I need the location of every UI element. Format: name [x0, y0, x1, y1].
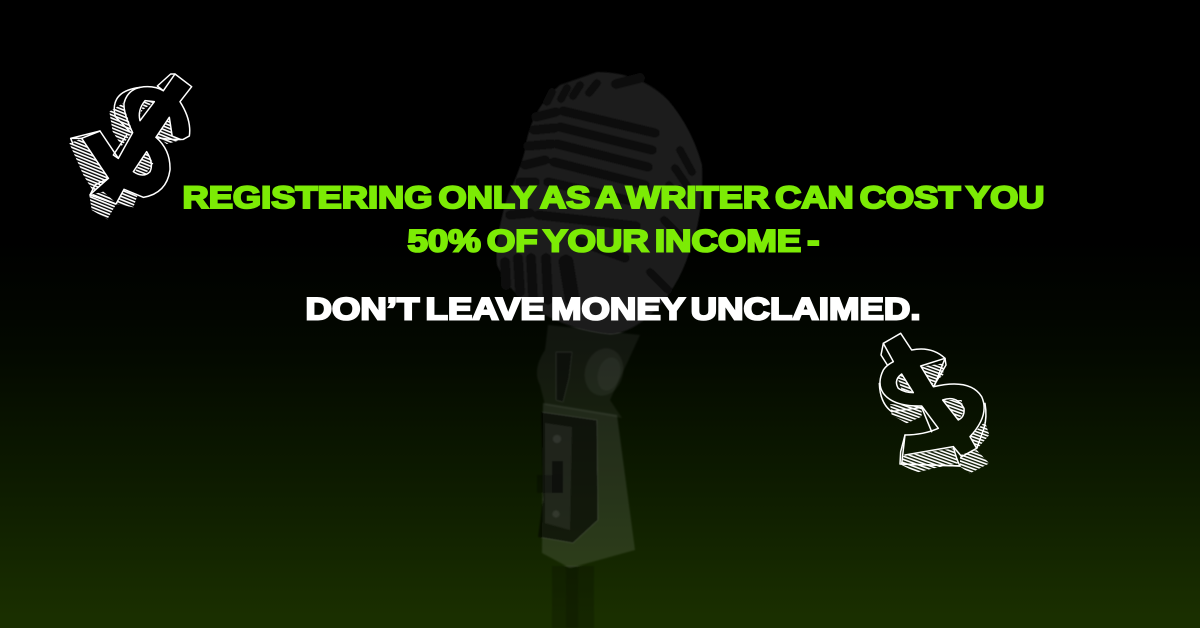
headline line 2: 50% OF YOUR INCOME - — [408, 222, 820, 258]
hatched shadow — [69, 101, 183, 219]
outline — [71, 74, 192, 204]
headline line 3: DON’T LEAVE MONEY UNCLAIMED. — [306, 290, 920, 326]
microphone neck and pivot — [537, 325, 640, 418]
microphone head — [496, 72, 702, 334]
dollar sign bottom right — [879, 333, 989, 473]
microphone base body — [537, 403, 635, 568]
hatched shadow — [890, 363, 989, 473]
outline — [879, 333, 986, 466]
microphone illustration — [496, 72, 702, 628]
microphone stand pole — [552, 566, 594, 628]
headline line 1: REGISTERING ONLY AS A WRITER CAN COST YOU — [182, 179, 1044, 215]
dollar sign top left — [69, 74, 192, 219]
